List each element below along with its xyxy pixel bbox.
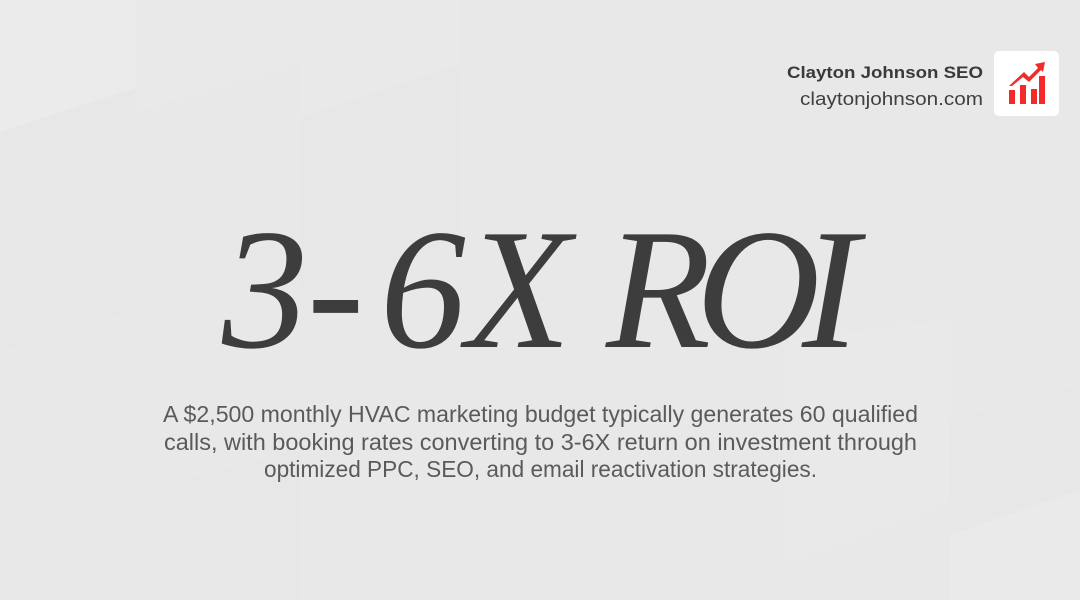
title: 3-6X ROI — [221, 195, 866, 385]
description text — [163, 401, 918, 482]
brand URL: claytonjohnson.com — [800, 89, 983, 109]
brand name: Clayton Johnson SEO — [787, 63, 983, 82]
description text: optimized PPC, SEO, and email reactivation strategies. — [264, 456, 817, 482]
icon: rising bar chart logo — [994, 51, 1059, 116]
description text: calls, with booking rates converting to 3-6X return on investment through — [164, 429, 917, 455]
brand block — [787, 51, 1059, 116]
description text: A $2,500 monthly HVAC marketing budget typically generates 60 qualified — [163, 401, 918, 427]
